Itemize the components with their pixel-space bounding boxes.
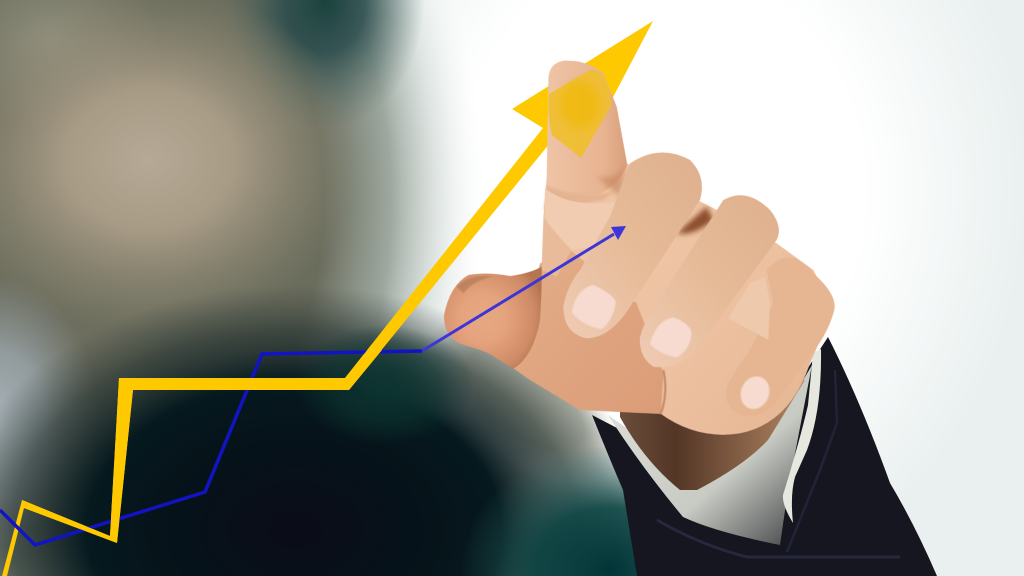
thumb — [444, 267, 542, 369]
palm left of crease — [513, 250, 663, 414]
bare wrist inside cuff — [620, 380, 805, 490]
palm and back of hand — [530, 61, 833, 435]
shadow between fingers — [677, 207, 713, 234]
pinky nail — [736, 372, 774, 413]
shirt cuff — [608, 349, 821, 545]
middle nail — [572, 285, 616, 329]
hand — [444, 61, 835, 435]
palm crease shadow — [661, 370, 665, 414]
fold beneath index finger — [545, 188, 617, 250]
yellow rising arrow, main body — [2, 21, 653, 576]
skin strip at side of palm — [542, 218, 572, 277]
index finger — [543, 61, 627, 210]
blue rising arrow — [0, 226, 626, 545]
shirt fabric — [608, 365, 812, 545]
ring finger — [640, 195, 779, 367]
pinky finger — [726, 257, 835, 416]
ring nail — [650, 317, 692, 357]
middle finger — [563, 152, 702, 338]
white sleeve lining strip — [783, 349, 821, 523]
translucent yellow arrow overlay on fingertip — [548, 70, 611, 158]
yellow arrow segment crossing blue line — [22, 344, 382, 543]
blazer sleeve — [592, 337, 937, 576]
